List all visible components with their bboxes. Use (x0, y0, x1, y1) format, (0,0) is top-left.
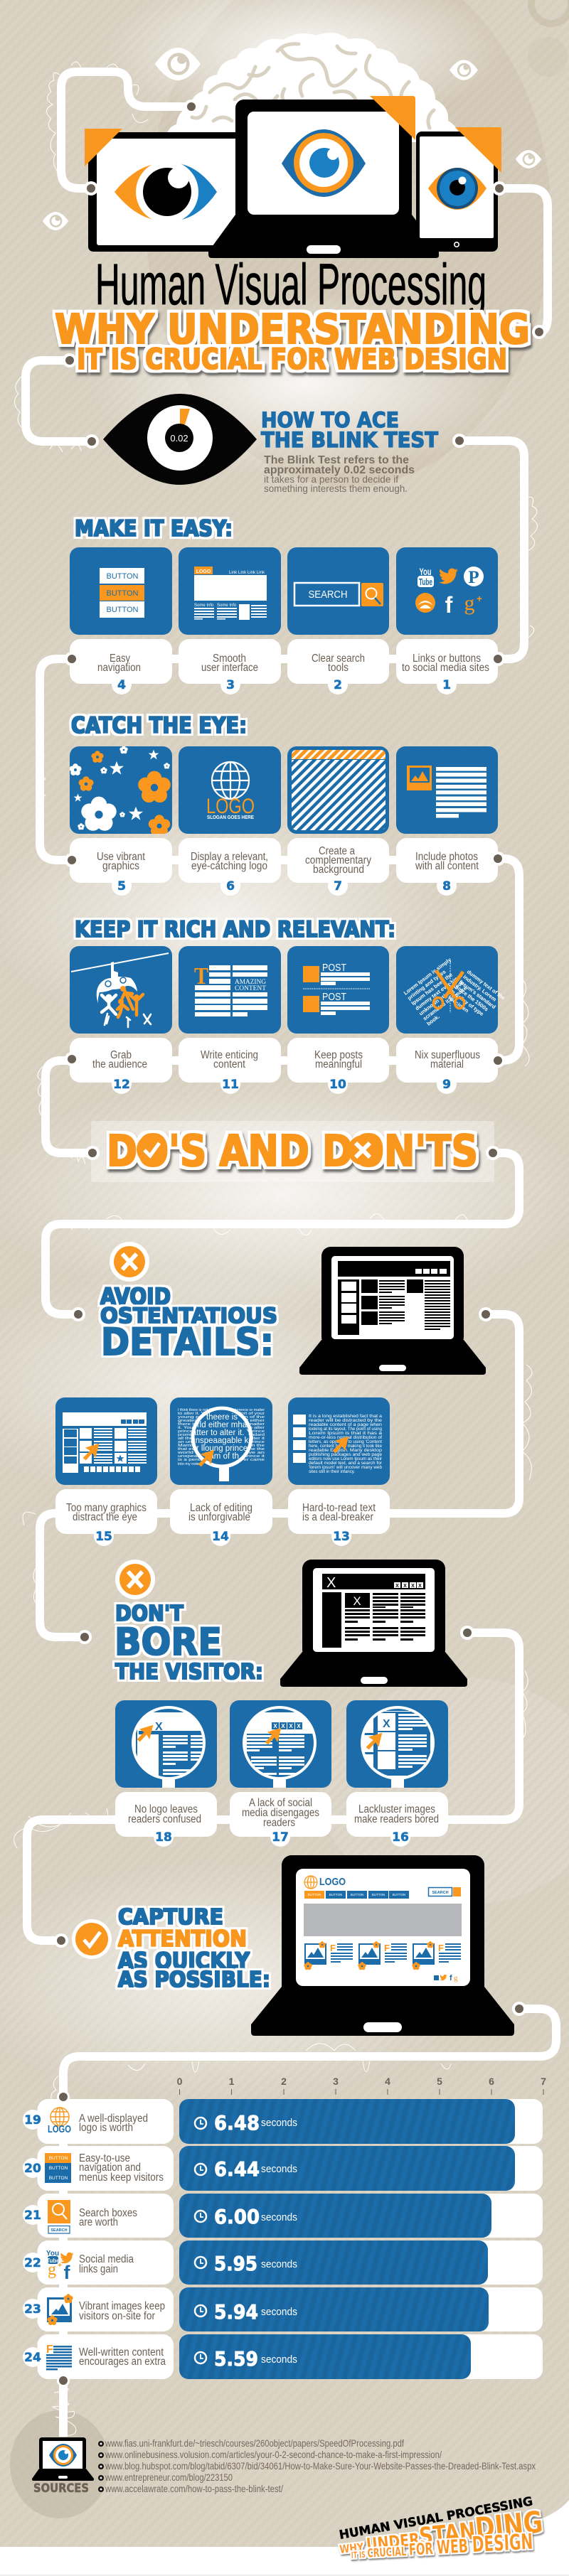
heading: avoid ostentatious details: DETAILS: (101, 1321, 274, 1364)
panel: hard-to-read text: readable English. Many desktop (309, 1448, 382, 1453)
chart row 20: BUTTON (49, 2156, 68, 2161)
labels row 4: is unforgivable (188, 1511, 250, 1523)
chart row 24: 5.59 (214, 2347, 258, 2371)
panel: no logo: X (155, 1721, 163, 1733)
panel: lack of editing: rld either mha (197, 1421, 248, 1429)
panel: enticing content: T (194, 963, 208, 989)
chart row 23: seconds (261, 2306, 297, 2318)
labels row 1: 4 (117, 678, 126, 692)
labels row 4: Hard-to-read text (302, 1502, 376, 1514)
panel: nix superfluous material: dummy text of the (466, 968, 506, 1001)
chart row 19: 6.48 (214, 2111, 260, 2135)
panel: social media links: You (420, 566, 431, 577)
panel: lack of editing: world either matter to have an (176, 1451, 265, 1455)
labels row 2: Include photos (415, 851, 478, 863)
laptop: boring site (280, 1560, 467, 1687)
bar chart axis: 1 (229, 2076, 235, 2087)
chart row 20: 6.44 (214, 2157, 260, 2181)
sources list: www.entrepreneur.com/blog/223150 (105, 2472, 233, 2483)
labels row 2: background (313, 864, 364, 876)
chart row 19: seconds (261, 2117, 297, 2129)
panel: easy navigation (70, 547, 172, 635)
chart row 22: You (46, 2250, 59, 2258)
laptop: boring site: X (403, 1584, 407, 1589)
panel: enticing content: AMAZING (235, 978, 267, 985)
bar chart axis: 4 (385, 2076, 390, 2087)
labels row 1 (65, 639, 505, 694)
panel: nix superfluous material: dummy text ever since (414, 972, 464, 1011)
labels row 5: No logo leaves (134, 1803, 198, 1815)
panel: search tools: SEARCH (309, 589, 347, 601)
bar chart axis: 5 (437, 2076, 442, 2087)
icon: check badge (54, 1919, 112, 1959)
labels row 3: 12 (113, 1078, 130, 1092)
panel: lack of editing: into my note (178, 1462, 199, 1466)
laptop: good site: BUTTON (393, 1893, 405, 1896)
labels row 5: readers (263, 1817, 295, 1829)
panel: nix superfluous material: unknown printer took (418, 979, 466, 1016)
chart row 22: Social media (79, 2253, 134, 2265)
panel: lack of editing (170, 1397, 272, 1485)
blink test description: The Blink Test refers to the (264, 454, 409, 466)
panel: hard-to-read text: reader will be distracted by the (309, 1418, 382, 1423)
sources list: www.accelawrate.com/how-to-pass-the-blink-test/ (105, 2483, 283, 2494)
labels row 5: 18 (155, 1830, 172, 1845)
chart row 20: menus keep visitors (79, 2172, 164, 2184)
labels row 1: user interface (201, 662, 258, 674)
labels row 2: Display a relevant, (191, 851, 268, 863)
panel: lack of editing: an unspeakable king of your prince (178, 1440, 265, 1444)
labels row 2: Use vibrant (97, 851, 146, 863)
labels row 2: graphics (102, 860, 139, 872)
heading: don't bore the visitor: BORE (115, 1621, 222, 1664)
labels row 2: 6 (226, 879, 235, 893)
laptop: good site (251, 1855, 514, 2036)
chart row 19: 19 (24, 2113, 41, 2127)
panel: meaningful posts: POST (322, 991, 346, 1003)
panel: nix superfluous material: Ipsum's standard (458, 979, 497, 1010)
panel: vibrant graphics (69, 746, 172, 836)
panel: lack of editing: promise of an a pentamond standard (178, 1433, 265, 1437)
panel: search tools (287, 547, 389, 635)
chart row 24 (23, 2334, 543, 2379)
labels row 2: 8 (442, 879, 451, 893)
blink test description: it takes for a person to decide if (264, 473, 398, 485)
chart row 20: BUTTON (49, 2176, 68, 2181)
panel: nix superfluous material: Lorem Ipsum is simply (403, 956, 453, 997)
panel: lack of editing: young prince and the main of the (178, 1415, 265, 1420)
panel: logo: LOGO (206, 795, 255, 818)
labels row 3: 11 (222, 1078, 239, 1092)
heading: how to ace the blink test: HOW TO ACE (261, 408, 399, 432)
chart row 21: Search boxes (79, 2207, 137, 2219)
panel: hard-to-read text: looking at its layout. The point of using (309, 1427, 382, 1432)
laptop: good site: f (450, 1974, 452, 1982)
labels row 1: 3 (226, 678, 235, 692)
chart row 22: 5.95 (214, 2252, 257, 2275)
chart row 20: seconds (261, 2163, 297, 2175)
labels row 3: meaningful (315, 1058, 362, 1070)
labels row 5: 17 (272, 1830, 289, 1845)
chart row 22 (23, 2240, 543, 2285)
chart row 21: seconds (261, 2211, 297, 2223)
labels row 2: with all content (415, 860, 479, 872)
panel: nix superfluous material: book. (425, 1013, 441, 1027)
laptop: good site: SEARCH (432, 1891, 449, 1895)
panel: grab the audience (70, 946, 172, 1034)
laptop: good site: BUTTON (329, 1893, 342, 1896)
laptop: boring site: X (418, 1584, 422, 1589)
blink test description (264, 454, 415, 494)
decorative small eyes (43, 48, 541, 230)
chart row 22: seconds (261, 2258, 297, 2270)
chart row 19 (23, 2099, 543, 2144)
chart row 20: BUTTON (49, 2166, 68, 2171)
panel: smooth user interface: LOGO (196, 569, 211, 574)
panel: hard-to-read text: readable content of a page when (309, 1422, 382, 1427)
blink test description: something interests them enough. (264, 483, 408, 494)
labels row 5: A lack of social (249, 1797, 312, 1809)
labels row 1: tools (328, 662, 349, 674)
chart row 24: F (46, 2344, 53, 2356)
sources list (98, 2437, 536, 2494)
chart row 23: Vibrant images keep (79, 2300, 165, 2312)
panel: lack of social media: X (289, 1723, 293, 1729)
panel: lack of social media: X (273, 1723, 277, 1729)
panel: social media links: Tube (419, 576, 432, 587)
labels row 3: the audience (92, 1058, 147, 1070)
heading: how to ace the blink test (261, 408, 438, 452)
laptop: good site: F (438, 1943, 444, 1953)
eye: right (428, 168, 486, 210)
panel: lack of editing: it. You have an unspeakable to alter (178, 1426, 265, 1430)
heading: don't bore the visitor: DON'T (115, 1601, 184, 1626)
labels row 1: 2 (334, 678, 342, 692)
labels row 4: 15 (95, 1530, 112, 1544)
laptop: good site: LOGO (319, 1876, 346, 1888)
panel: nix superfluous material: specimen (447, 994, 470, 1014)
panel: nix superfluous material: Ipsum has been the (410, 972, 454, 1007)
panel: social media links: + (477, 593, 482, 604)
labels row 2: 7 (334, 879, 342, 893)
chart row 22: f (64, 2262, 71, 2283)
chart row 24: 24 (24, 2351, 41, 2365)
panel: hard-to-read text: Lorem Ipsum is that it has a (309, 1431, 382, 1436)
heading: how to ace the blink test: THE BLINK TEST (261, 428, 438, 452)
laptop: good site: BUTTON (308, 1893, 321, 1896)
chart row 19: logo is worth (79, 2122, 133, 2134)
eye: centre (282, 129, 366, 197)
path nodes chart (57, 2091, 70, 2387)
panel: easy navigation: BUTTON (106, 589, 139, 598)
bar chart axis: 7 (541, 2076, 546, 2087)
laptop (208, 96, 439, 258)
labels row 1: navigation (97, 662, 141, 674)
labels row 1: 1 (442, 678, 451, 692)
panel: enticing content: CONTENT (235, 984, 267, 992)
labels row 5: readers confused (128, 1813, 201, 1825)
heading: make it easy: MAKE IT EASY: (75, 516, 233, 542)
panel: lackluster images: X (383, 1718, 390, 1730)
labels row 1: to social media sites (402, 662, 489, 674)
panel: smooth user interface (179, 547, 281, 635)
panel: lack of editing: there is none I think there is matter (178, 1422, 265, 1427)
chart row 22: Tube (46, 2258, 60, 2264)
panel: social media links: g (464, 591, 475, 615)
panel: no logo (115, 1700, 217, 1788)
panel: hard-to-read text: default model text, and a search for (309, 1461, 383, 1466)
footer title lockup: HUMAN VISUAL PROCESSING (338, 2494, 534, 2543)
path node (71, 1307, 493, 1321)
labels row 5: make readers bored (354, 1813, 439, 1825)
labels row 1: Links or buttons (413, 653, 481, 665)
labels row 3: Grab (110, 1049, 132, 1061)
panel: hard-to-read text: editors now use Lorem Ipsum as their (309, 1456, 383, 1461)
labels row 4: 13 (333, 1530, 350, 1544)
panel: do's and don'ts banner: DO'S AND DON'TS (107, 1126, 478, 1176)
hero devices (85, 96, 501, 258)
sources list: www.fias.uni-frankfurt.de/~triesch/courses/260object/papers/SpeedOfProcessing.pdf (105, 2437, 404, 2449)
chart row 21 (23, 2194, 543, 2238)
panel: hard-to-read text: more-or-less normal distribution of (309, 1435, 382, 1440)
panel: hard-to-read text: letters, as opposed to using 'Content (309, 1439, 382, 1444)
panel: social media links (396, 547, 498, 635)
chart row 20: navigation and (79, 2162, 141, 2174)
labels row 4: 14 (212, 1530, 229, 1544)
panel: photos with content (396, 746, 498, 834)
panel: lack of editing: unspeakable your young prince it (178, 1454, 265, 1459)
footer title lockup: IT IS CRUCIAL FOR WEB DESIGN (351, 2530, 533, 2564)
chart row 20: Easy-to-use (79, 2152, 130, 2164)
heading: capture attention: AS QUICKLY (118, 1948, 250, 1974)
panel: nix superfluous material: a galley of type (450, 989, 485, 1017)
heading: don't bore the visitor (115, 1601, 263, 1685)
labels row 3: 10 (329, 1078, 346, 1092)
labels row 5 (115, 1792, 448, 1847)
sources list: www.onlinebusiness.volusion.com/articles/your-0-2-second-chance-to-make-a-first-impression/ (105, 2449, 442, 2460)
heading: catch the eye: CATCH THE EYE: (71, 713, 247, 739)
chart row 22: g (48, 2260, 56, 2279)
labels row 5: media disengages (242, 1807, 319, 1819)
heading: keep it rich and relevant: KEEP IT RICH AND RELEVANT: (75, 917, 395, 943)
chart row 21: are worth (79, 2216, 118, 2228)
laptop: good site: BUTTON (351, 1893, 363, 1896)
panel: lack of editing: to alter it. You are the comfort of your (178, 1412, 265, 1416)
chart row 23 (23, 2287, 543, 2331)
chart row 24: Well-written content (79, 2346, 164, 2358)
labels row 5: Lackluster images (358, 1803, 435, 1815)
panel: lack of editing: atter to alter it. Y (192, 1429, 252, 1437)
panel: lack of editing: ham of th (205, 1452, 239, 1461)
labels row 3: content (213, 1058, 246, 1070)
chart row 21: 6.00 (214, 2205, 260, 2228)
panel: hard-to-read text: publishing packages and web page (309, 1452, 382, 1457)
blink test description: approximately 0.02 seconds (264, 464, 415, 476)
labels row 1: Easy (110, 653, 130, 665)
labels row 1: Smooth (213, 653, 246, 665)
bar chart axis: 0 (177, 2076, 183, 2087)
chart row 20 (23, 2146, 543, 2191)
panel: lack of editing: greatest praise in the world either (178, 1419, 265, 1423)
panel: lack of social media: X (297, 1723, 301, 1729)
chart row 21: SEARCH (50, 2228, 68, 2233)
chart row 22: 22 (24, 2256, 41, 2270)
laptop: good site: g (454, 1974, 458, 1982)
heading: capture attention: ATTENTION (118, 1926, 247, 1952)
labels row 2: Create a (319, 845, 355, 857)
chart row 20: 20 (24, 2162, 41, 2176)
labels row 5: 16 (392, 1830, 409, 1845)
laptop: boring site: X (326, 1575, 336, 1591)
path nodes (78, 1626, 474, 1644)
laptop: boring site: X (353, 1594, 361, 1608)
panel: lack of editing: is a pentam of the that ever came (178, 1458, 265, 1462)
labels row 2 (65, 838, 505, 896)
labels row 4: is a deal-breaker (302, 1511, 373, 1523)
bar chart axis: 6 (489, 2076, 494, 2087)
panel: complementary background (287, 746, 389, 834)
brain illustration (167, 33, 459, 142)
panel: easy navigation: BUTTON (106, 606, 139, 614)
labels row 3: material (430, 1058, 464, 1070)
labels row 2: complementary (305, 854, 371, 866)
chart row 21: 21 (24, 2209, 41, 2223)
heading: avoid ostentatious details: OSTENTATIOUS (100, 1304, 277, 1328)
bottom white area (0, 2500, 569, 2576)
labels row 4: distract the eye (73, 1511, 137, 1523)
panel: lack of social media: X (281, 1723, 285, 1729)
icon: X badge (110, 1242, 149, 1282)
panel: social media links: f (445, 592, 453, 618)
panel: lack of editing: Mamillius your young prince in the (178, 1444, 265, 1448)
panel: social media links: P (468, 568, 479, 587)
laptop: boring site: X (411, 1584, 415, 1589)
panel: smooth user interface: Some Info (194, 603, 214, 608)
laptop: good site: F (330, 1943, 336, 1953)
panel: hard-to-read text: 'lorem ipsum' will uncover many web (309, 1465, 382, 1470)
phone (416, 127, 501, 252)
panel: easy navigation: BUTTON (106, 572, 139, 581)
panel: lack of editing: I think there is not the slightest coherence or matter (178, 1408, 265, 1412)
panel: lack of editing: unspeaagable ko (191, 1437, 253, 1445)
bar chart axis: 3 (333, 2076, 339, 2087)
heading: avoid ostentatious details (100, 1283, 277, 1364)
panel: nix superfluous material: printing and types (406, 968, 447, 1002)
bar chart axis (177, 2076, 546, 2095)
chart row 23: 5.94 (214, 2300, 258, 2324)
panel: lack of editing: theere is (206, 1413, 238, 1422)
chart row 22: + (58, 2262, 62, 2270)
labels row 3: Nix superfluous (415, 1049, 480, 1061)
panel: meaningful posts: POST (322, 962, 346, 974)
chart row 23: 23 (24, 2302, 41, 2317)
panel: meaningful posts (287, 946, 389, 1034)
bar chart axis: 2 (281, 2076, 287, 2087)
labels row 4: Too many graphics (66, 1502, 147, 1514)
panel: enticing content (179, 946, 281, 1034)
panel: smooth user interface: Some Info (217, 603, 237, 608)
labels row 3: 9 (442, 1078, 451, 1092)
tablet (85, 129, 248, 252)
chart row 24: seconds (261, 2354, 297, 2366)
labels row 1: Clear search (312, 653, 365, 665)
heading: capture attention (118, 1905, 270, 1992)
heading: don't bore the visitor: THE VISITOR: (115, 1660, 263, 1685)
panel: hard-to-read text (288, 1397, 390, 1485)
laptop: good site: F (384, 1943, 390, 1953)
panel: hard-to-read text: It is a long established fact that a (309, 1414, 382, 1419)
panel: hard-to-read text: sites still in their infancy. (309, 1469, 355, 1474)
panel: nix superfluous material: industry. Lorem (462, 974, 498, 1003)
panel: lackluster images (346, 1700, 448, 1788)
icon: sources laptop (32, 2437, 94, 2481)
labels row 4 (55, 1489, 390, 1546)
path nodes top (63, 100, 546, 449)
panel: nix superfluous material: since the 1500s (454, 984, 489, 1013)
labels row 4: Lack of editing (190, 1502, 252, 1514)
heading: sources: SOURCES (33, 2481, 89, 2496)
footer title lockup: WHY UNDERSTANDING (337, 2504, 544, 2560)
panel: lack of editing: r lloung prince (196, 1444, 248, 1453)
panel: lack of editing: all the world either matter to alter it (178, 1437, 265, 1441)
heading: capture attention: AS POSSIBLE: (118, 1968, 270, 1992)
path node (512, 2002, 526, 2016)
panel: lack of editing: prince of the world the young prince (178, 1429, 265, 1434)
panel: logo (179, 746, 281, 834)
eye: left (115, 161, 217, 223)
panel: lack of social media (230, 1700, 331, 1788)
panel: logo: SLOGAN GOES HERE (207, 814, 254, 820)
laptop: boring site: X (395, 1584, 399, 1589)
heading: capture attention: CAPTURE (118, 1905, 223, 1930)
panel: nix superfluous material (396, 946, 506, 1034)
laptop: good site: BUTTON (372, 1893, 385, 1896)
heading: avoid ostentatious details: AVOID (100, 1283, 171, 1310)
blink eye: 0.02 (170, 433, 188, 444)
laptop: cluttered site (299, 1247, 486, 1375)
labels row 2: eye-catching logo (191, 860, 267, 872)
chart row 24: encourages an extra (79, 2356, 166, 2368)
panel: lack of editing: that ever came into my note the the (178, 1447, 265, 1451)
chart row 23: visitors on-site for (79, 2310, 155, 2322)
chart row 19: LOGO (48, 2123, 71, 2135)
panel: hard-to-read text: here, content here', making it look like (309, 1444, 382, 1449)
panel: nix superfluous material: scrambled it to make (422, 984, 468, 1022)
chart row 22: links gain (79, 2263, 118, 2275)
chart row 19: A well-displayed (79, 2113, 148, 2125)
labels row 3: Keep posts (314, 1049, 363, 1061)
icon: X badge 2 (115, 1560, 155, 1599)
labels row 3: Write enticing (201, 1049, 258, 1061)
title: Why understanding: WHY UNDERSTANDING (55, 305, 530, 353)
labels row 3 (65, 1038, 505, 1094)
labels row 2: 5 (117, 879, 126, 893)
panel: smooth user interface: Link Link Link Link (229, 571, 265, 575)
panel: too many graphics (55, 1397, 157, 1485)
blink eye (103, 394, 257, 485)
